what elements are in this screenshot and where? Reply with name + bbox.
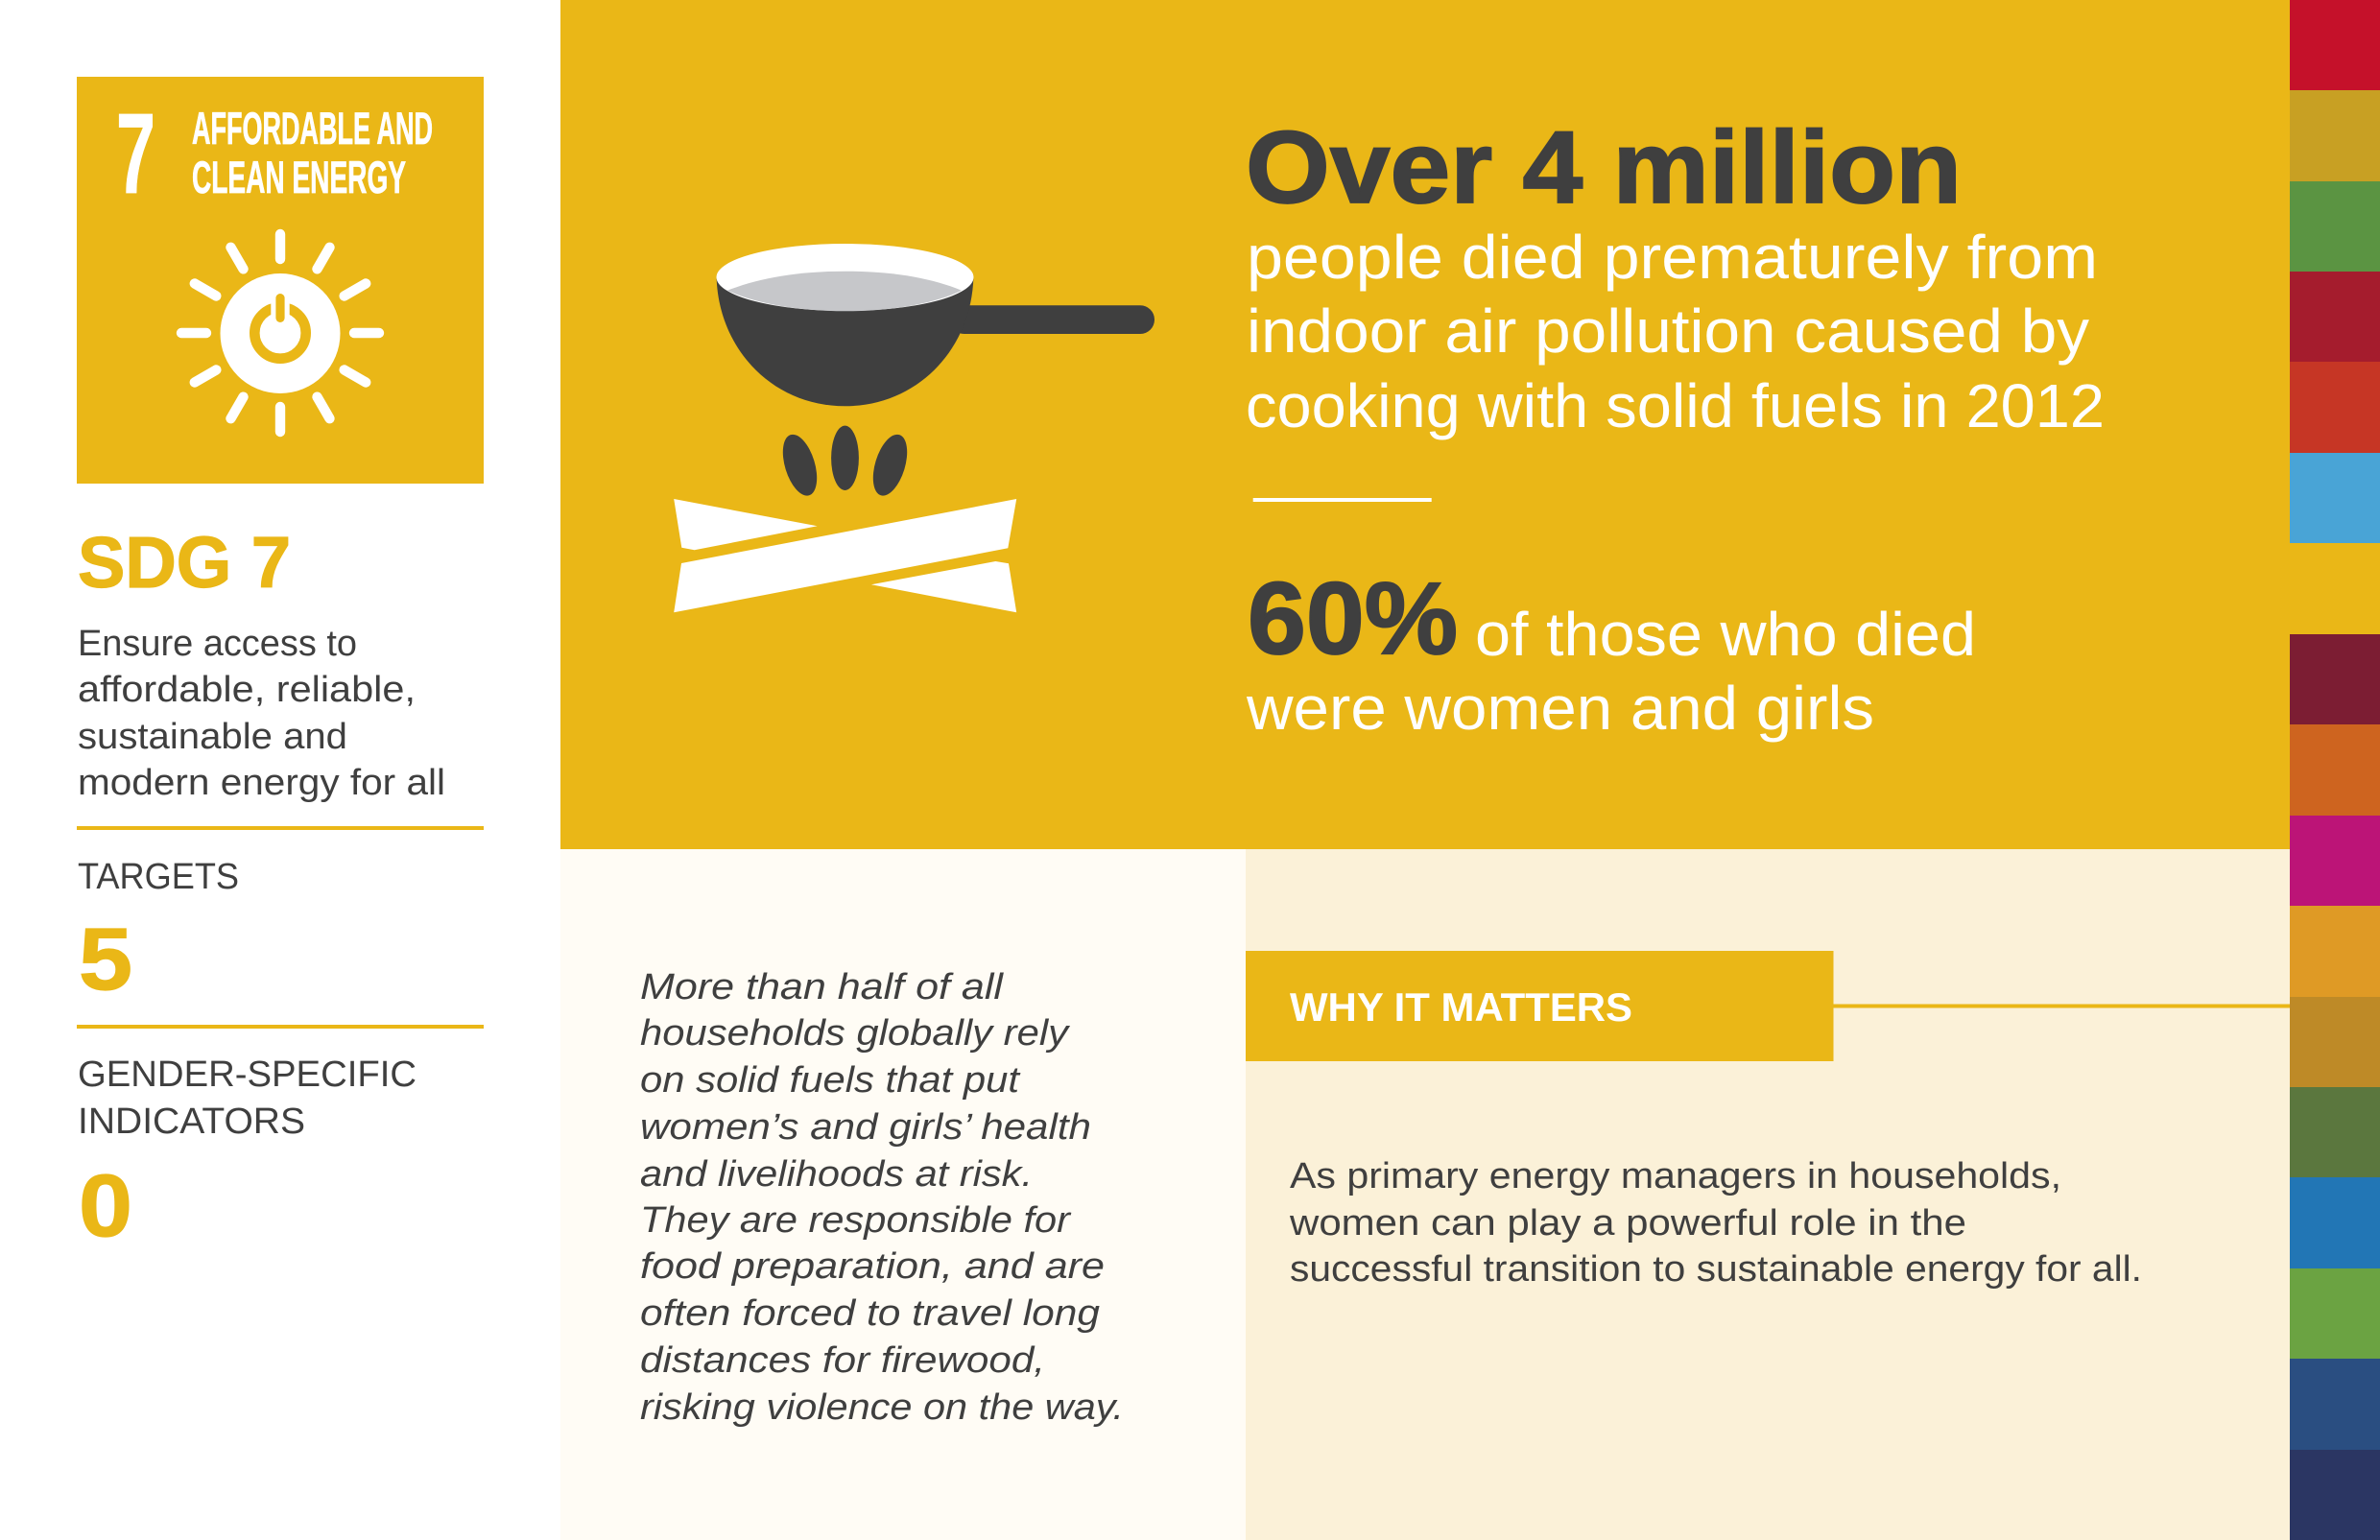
text: goal description: modern energy for all: [78, 763, 445, 803]
callout label: WHY IT MATTERS: [1290, 984, 1632, 1030]
label: gender-specific indicators: GENDER-SPECIFIC: [78, 1054, 416, 1095]
text: italic paragraph: [640, 967, 1124, 1428]
badge title: AFFORDABLE AND: [192, 103, 433, 154]
statistic: 60 percent: 60%: [1248, 560, 1458, 675]
text: italic paragraph: women’s and girls’ health: [640, 1107, 1091, 1148]
pan rim: [716, 244, 973, 311]
badge number: 7: [116, 90, 155, 218]
text: goal description: affordable, reliable,: [78, 670, 416, 710]
badge title: [192, 103, 433, 202]
pan handle: [950, 305, 1154, 334]
headline: over 4 million: Over 4 million: [1246, 109, 1962, 225]
callout: why it matters: [1246, 951, 2290, 1061]
text: italic paragraph: households globally rely: [640, 1013, 1070, 1054]
icon: pan over fire: [674, 244, 1154, 612]
label: gender-specific indicators: INDICATORS: [78, 1102, 305, 1142]
flames: [776, 426, 914, 500]
statistic: 60 percent: were women and girls: [1246, 674, 1874, 743]
text: statistic description: indoor air pollution caused by: [1247, 296, 2089, 366]
statistic: 60 percent: of those who died: [1475, 600, 1976, 669]
text: italic paragraph: food preparation, and are: [640, 1246, 1105, 1287]
pan bowl: [717, 277, 973, 406]
text: italic paragraph: often forced to travel long: [640, 1293, 1100, 1334]
panel: lower right cream: [1246, 849, 2290, 1540]
text: statistic description: [1246, 223, 2105, 440]
text: italic paragraph: distances for firewood,: [640, 1340, 1045, 1381]
panel: top yellow band: [560, 0, 2380, 849]
text: why it matters body: As primary energy managers in households,: [1290, 1156, 2061, 1196]
pan contents: [727, 272, 962, 311]
label: targets: TARGETS: [78, 857, 239, 897]
colour strip of SDG goals: [2290, 0, 2380, 1540]
text: why it matters body: successful transition to sustainable energy for all.: [1290, 1249, 2142, 1290]
firewood logs: [674, 499, 1016, 612]
text: goal description: [78, 624, 445, 803]
text: goal description: Ensure access to: [78, 624, 357, 664]
panel: SDG 7 badge: [77, 77, 484, 484]
text: statistic description: cooking with solid fuels in 2012: [1246, 371, 2105, 440]
panel: lower left light cream: [560, 849, 1246, 1540]
text: statistic description: people died prematurely from: [1247, 223, 2098, 292]
text: italic paragraph: More than half of all: [640, 967, 1005, 1007]
number: 0 indicators: 0: [79, 1157, 132, 1255]
text: goal description: sustainable and: [78, 717, 347, 757]
icon: sun with power button: [181, 234, 379, 432]
number: 5 targets: 5: [79, 911, 132, 1008]
text: italic paragraph: They are responsible for: [640, 1200, 1071, 1241]
text: why it matters body: [1289, 1156, 2142, 1290]
text: italic paragraph: on solid fuels that put: [640, 1060, 1021, 1101]
badge title: CLEAN ENERGY: [192, 152, 406, 202]
text: why it matters body: women can play a powerful role in the: [1289, 1203, 1966, 1244]
heading: SDG 7: SDG 7: [78, 522, 291, 603]
text: italic paragraph: and livelihoods at risk.: [640, 1154, 1033, 1195]
text: italic paragraph: risking violence on the way.: [640, 1387, 1124, 1428]
statistic: 60 percent: [1246, 560, 1976, 743]
label: gender-specific indicators: [78, 1054, 416, 1142]
